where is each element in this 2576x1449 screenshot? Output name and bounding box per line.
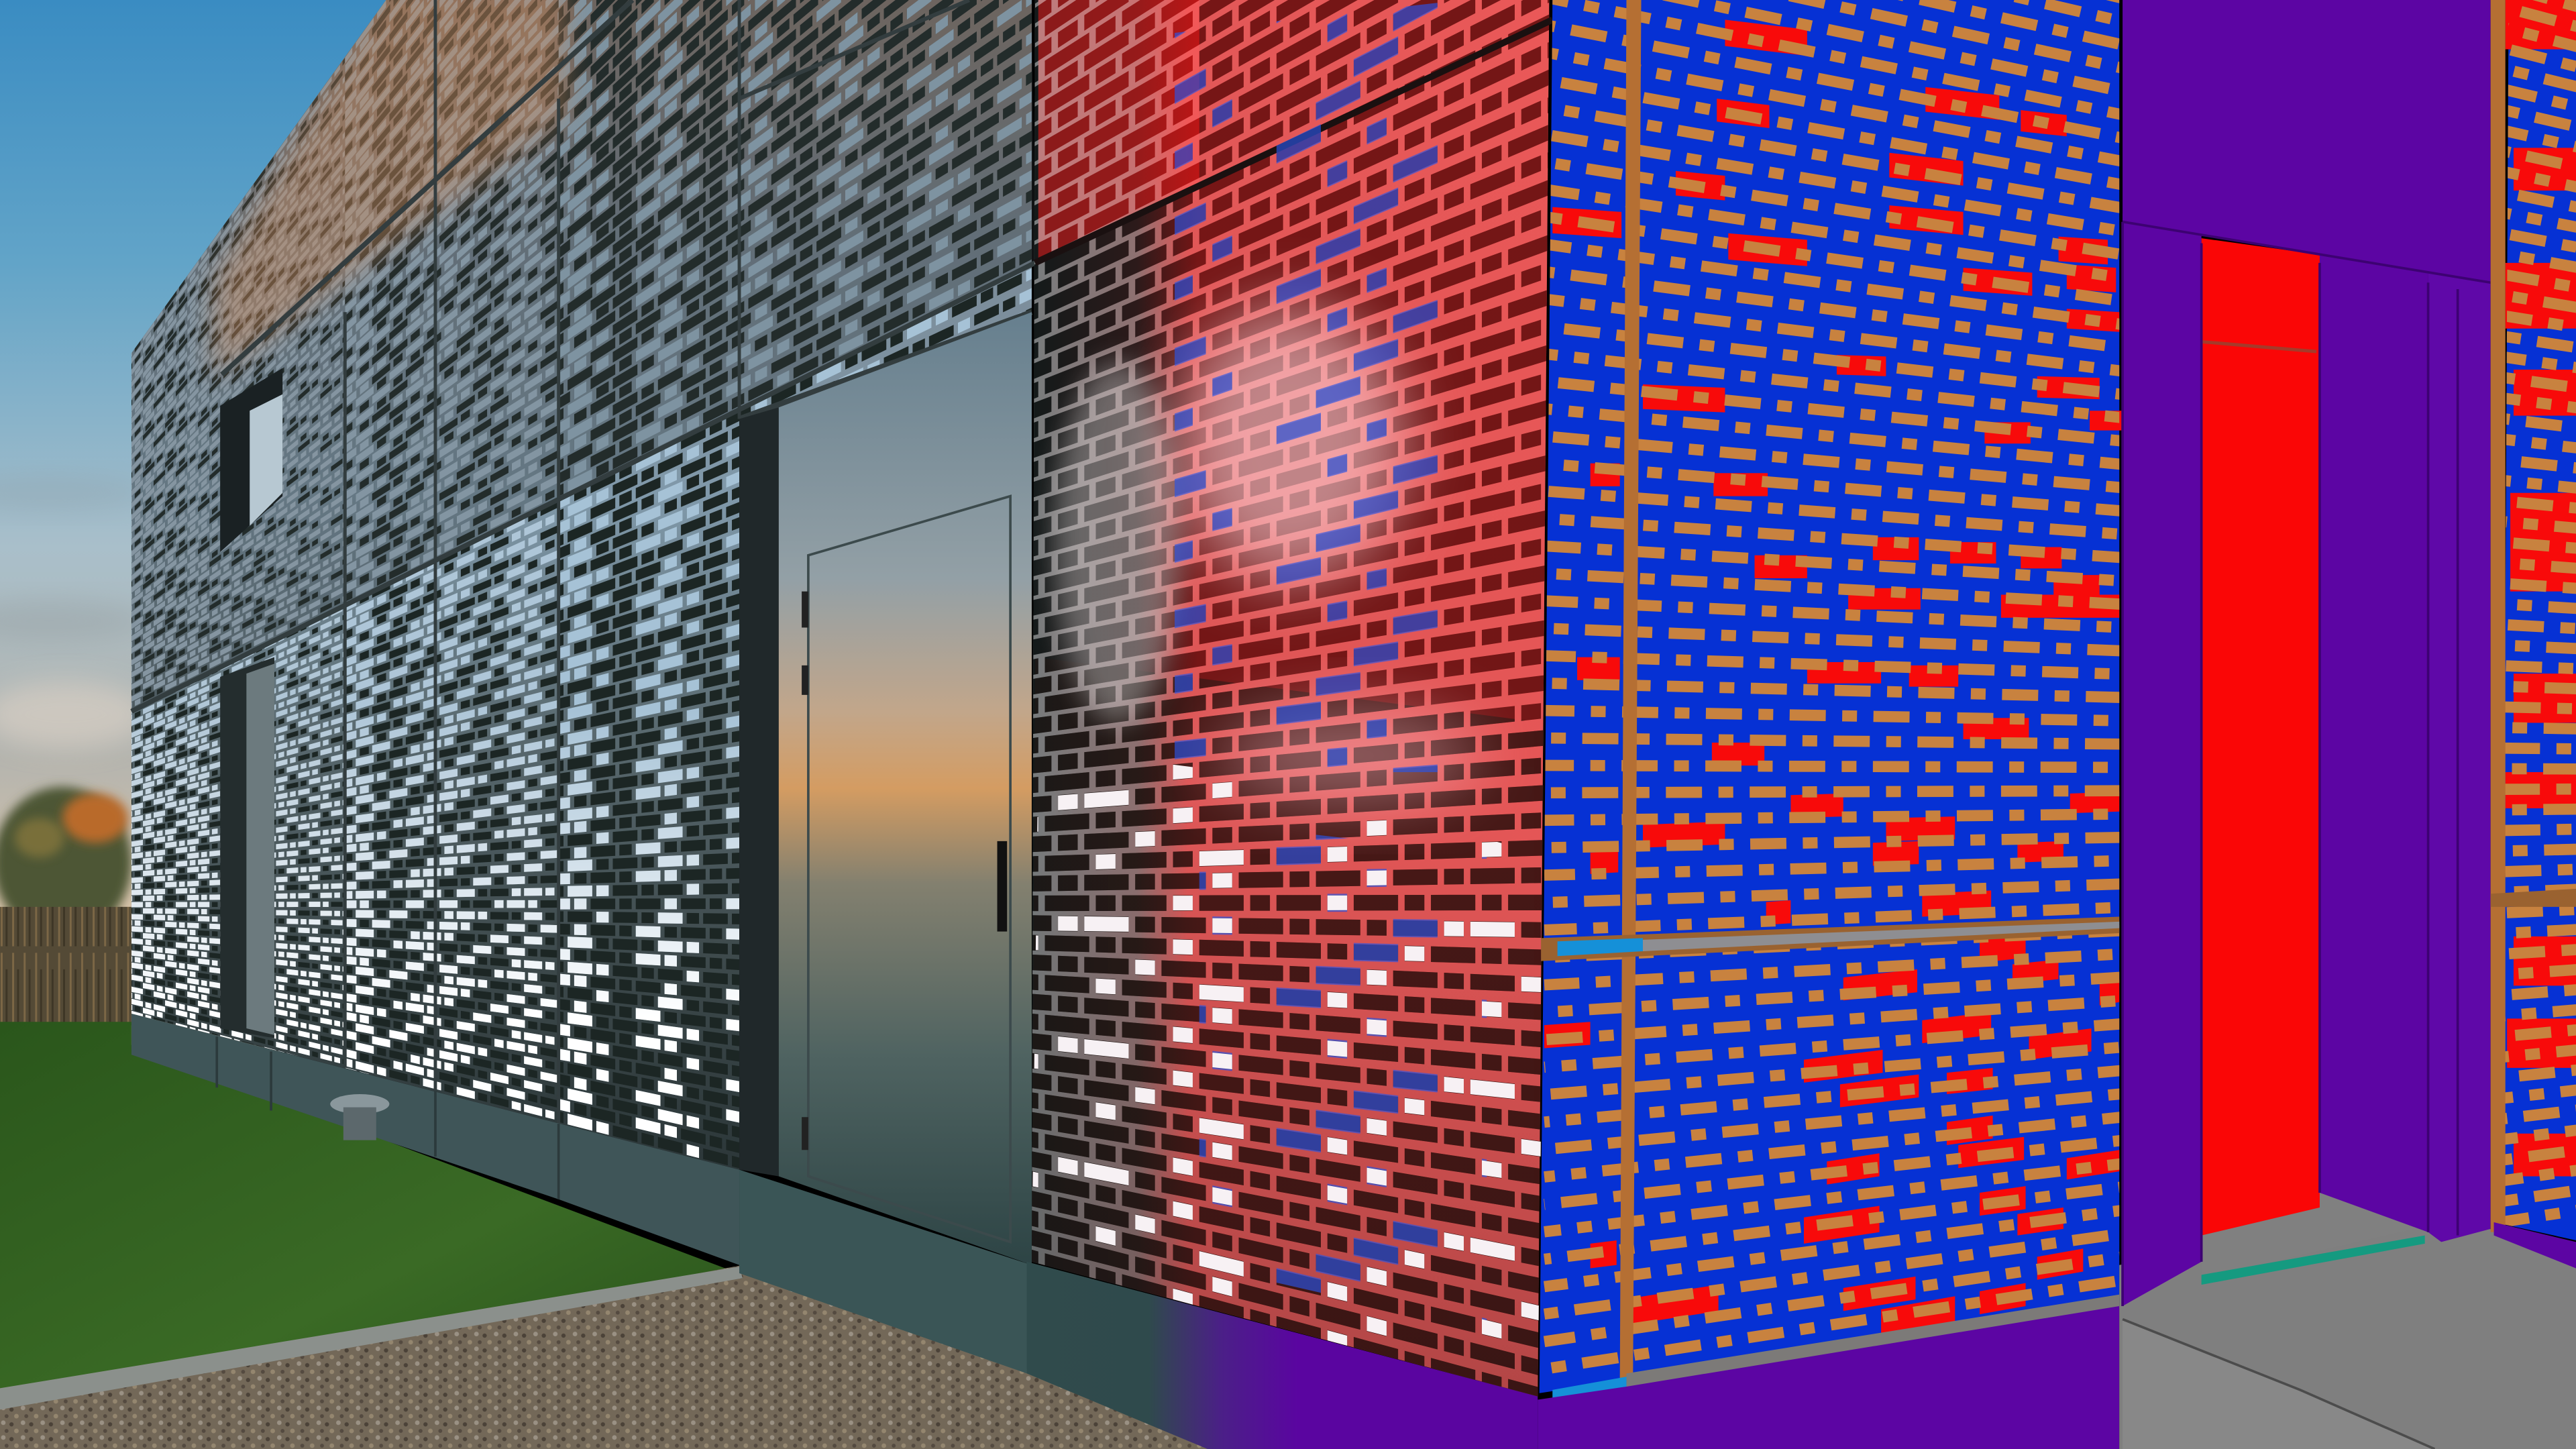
vent lamp xyxy=(330,1094,389,1140)
blended frame colour xyxy=(1032,0,1549,1397)
thermal model: floor xyxy=(2119,1216,2576,1449)
plinth: door kick panel xyxy=(739,1170,1032,1373)
lower window xyxy=(220,657,274,1038)
door surround panel xyxy=(779,312,1032,1265)
door handle xyxy=(998,841,1007,932)
thermal model: far wall mullion and seam xyxy=(2491,0,2576,1232)
blue wall base xyxy=(1540,0,2119,1393)
thermal model: brown mullion xyxy=(1620,0,1642,1380)
thermal model: top beam xyxy=(2123,0,2491,1306)
door column xyxy=(739,407,779,1176)
thermal model: threshold xyxy=(2202,1186,2434,1285)
blue far wall base xyxy=(2502,0,2576,1240)
sky xyxy=(0,0,493,1051)
facade panels: blended photo to red xyxy=(1032,0,1552,1397)
upper window xyxy=(220,368,282,552)
door hinges xyxy=(804,592,806,1150)
thermal model: far plinth xyxy=(2494,1222,2576,1269)
left bricks far section xyxy=(131,58,345,1064)
white bricks xyxy=(0,0,1556,1399)
darker bricks lower down xyxy=(0,0,1556,1399)
thermal model: horizontal seam xyxy=(1541,917,2119,961)
plinth: photo to purple xyxy=(1027,1262,1538,1449)
reflection highlights xyxy=(1055,304,1479,805)
thermal model: red door recess xyxy=(2202,238,2320,1236)
thermal model: purple reveal xyxy=(2320,246,2428,1232)
upper storey shade xyxy=(131,0,1035,711)
orange brick marks xyxy=(1544,0,2576,1369)
thermal model: purple plinth xyxy=(1538,1306,2119,1449)
facade panels: photographic part xyxy=(130,0,1034,1170)
red tint on upper panel xyxy=(1038,0,1199,260)
thermal model: purple pillar right xyxy=(2428,246,2491,1242)
lower shading xyxy=(1032,0,1549,1397)
left bricks near section xyxy=(558,0,1032,1169)
gravel path xyxy=(0,1265,1224,1449)
plinth: left xyxy=(131,1014,739,1265)
panel joints xyxy=(131,0,1035,1124)
left bricks middle section xyxy=(345,0,558,1120)
seam xyxy=(1035,19,1552,263)
tree and reeds xyxy=(0,787,131,1025)
hot bricks far wall xyxy=(2506,0,2576,1176)
lawn xyxy=(0,1022,743,1397)
metal door xyxy=(805,496,1010,1242)
thermal model: purple pillar left xyxy=(2123,213,2202,1306)
warm sunset tint, upper storey xyxy=(213,0,567,378)
blended dark bricks xyxy=(0,0,1556,1399)
thermal model: lower edge strip xyxy=(1552,1295,2119,1401)
thermal model: wall panels xyxy=(1540,0,2576,1393)
hot bricks xyxy=(1544,19,2123,1336)
facade base colour xyxy=(131,0,1032,1170)
blue flecks xyxy=(0,0,1556,1399)
path curb xyxy=(0,1267,743,1409)
